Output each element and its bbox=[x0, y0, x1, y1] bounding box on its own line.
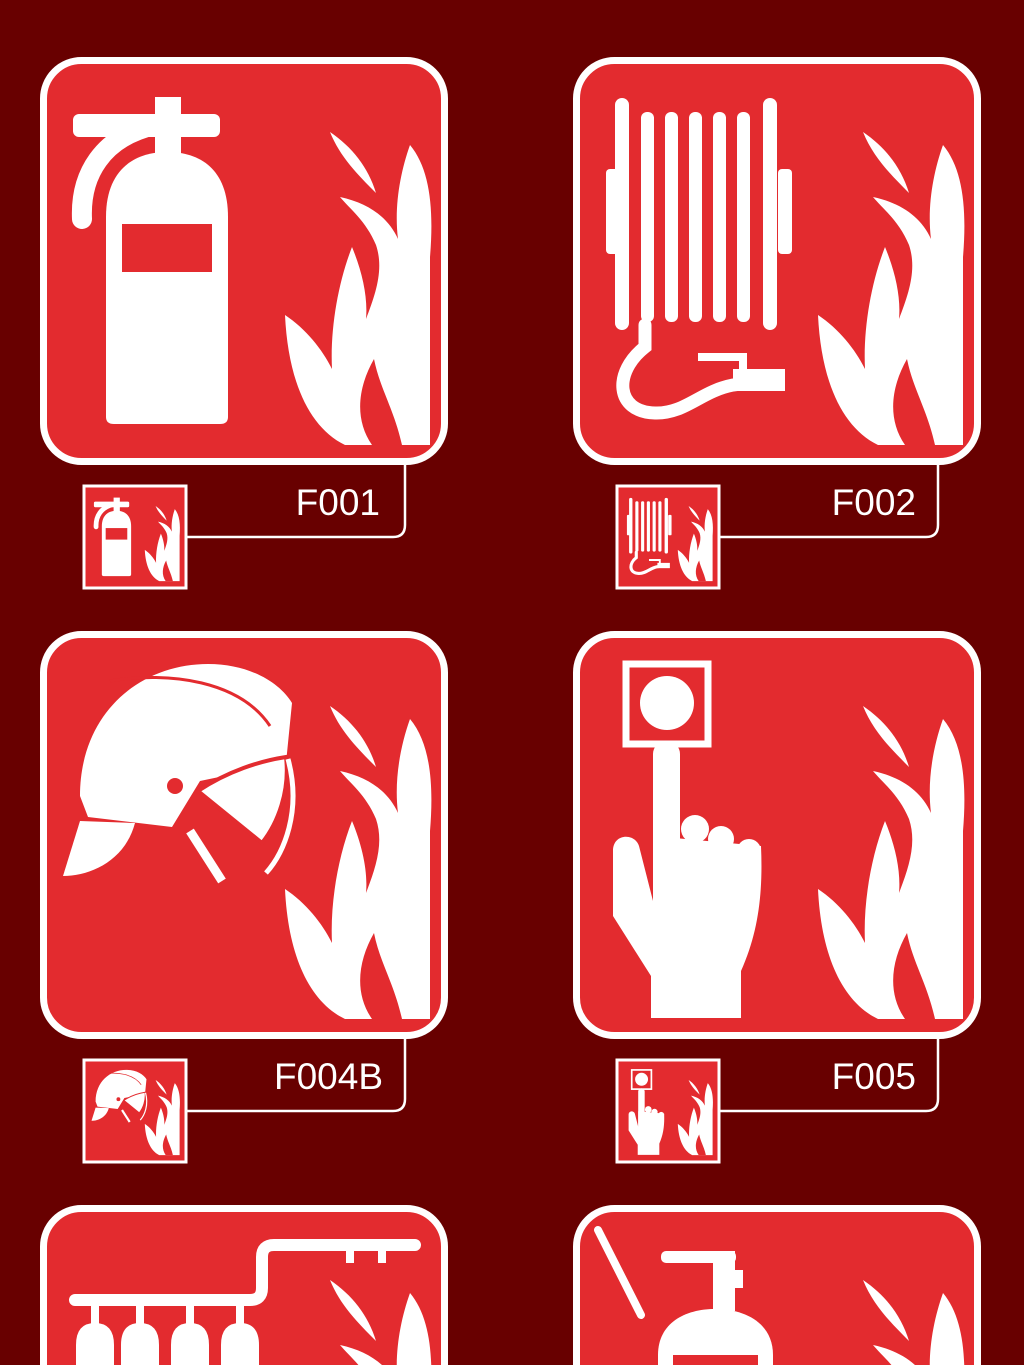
sign: F001 fire extinguisher bbox=[44, 60, 444, 588]
small icon: F002 bbox=[617, 486, 719, 588]
label: F002: F002 bbox=[832, 482, 916, 523]
sign: F002 fire hose reel bbox=[576, 60, 978, 588]
label: F005: F005 bbox=[832, 1056, 916, 1097]
small icon: F001 bbox=[84, 486, 186, 588]
sign: wheeled extinguisher (partial) bbox=[576, 1208, 978, 1365]
sign: fixed extinguishing system (partial) bbox=[44, 1208, 444, 1365]
sign: F004B firefighter equipment bbox=[44, 634, 444, 1162]
small icon: F004B bbox=[84, 1060, 186, 1162]
small icon: F005 bbox=[617, 1060, 719, 1162]
label: F004B: F004B bbox=[274, 1056, 383, 1097]
label: F001: F001 bbox=[296, 482, 380, 523]
sign: F005 fire alarm call point bbox=[576, 634, 978, 1162]
